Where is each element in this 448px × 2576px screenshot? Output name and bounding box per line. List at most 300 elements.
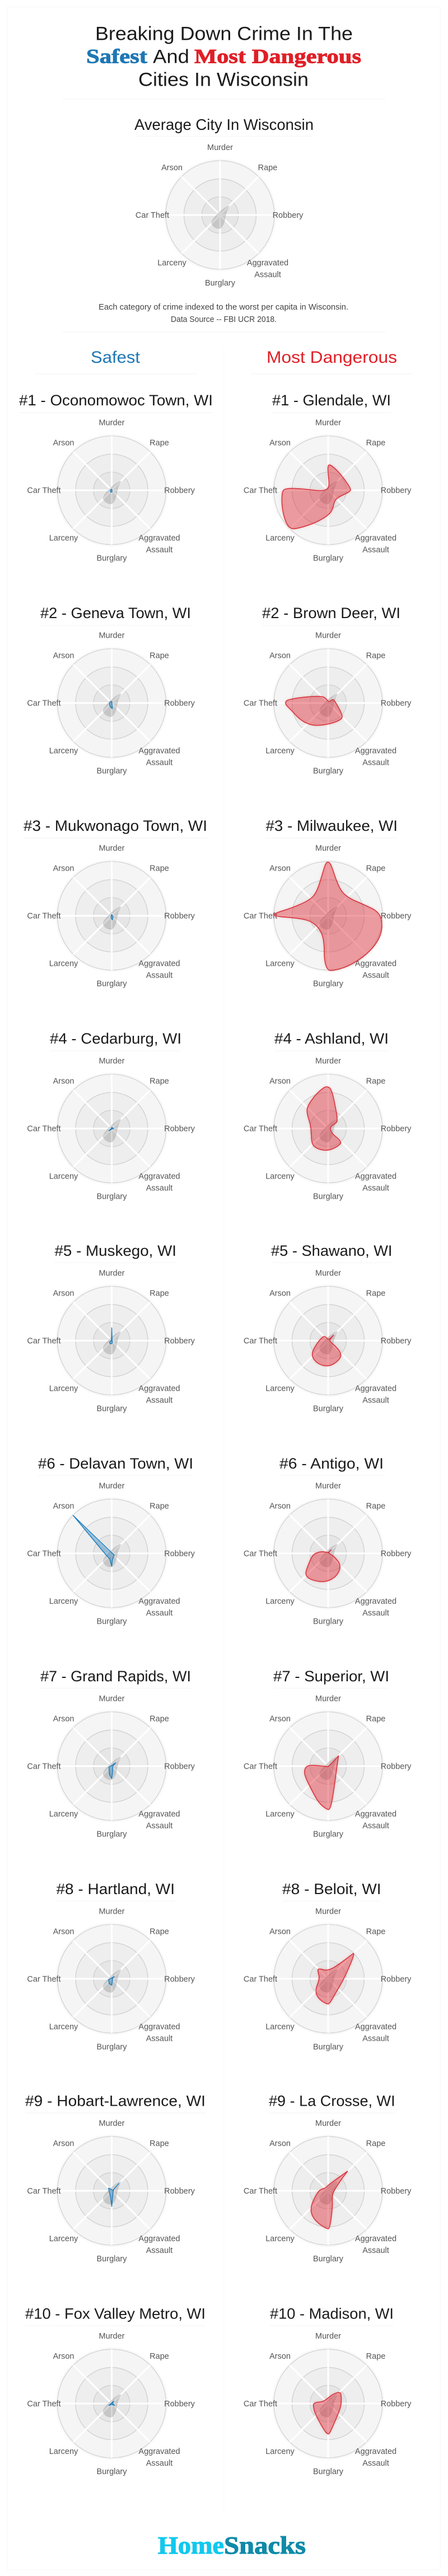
axis labels: Robbery — [164, 487, 195, 495]
axis labels: Murder — [99, 844, 125, 853]
panel: most dangerous #5 — [244, 1242, 412, 1413]
axis labels: Burglary — [313, 554, 344, 563]
radar chart — [27, 1481, 195, 1626]
axis labels: Aggravated — [355, 1172, 396, 1181]
axis labels: Arson — [161, 163, 183, 172]
city title: #2 - Brown Deer, WI — [262, 605, 400, 621]
axis labels: Rape — [150, 1502, 169, 1511]
axis labels: Aggravated — [355, 534, 396, 543]
data shape — [109, 1976, 114, 1985]
panel: most dangerous #4 — [244, 1030, 412, 1201]
panel: most dangerous #9 — [244, 2093, 412, 2264]
axis labels: Rape — [150, 864, 169, 873]
city title: #4 - Ashland, WI — [274, 1030, 389, 1047]
radar chart — [27, 632, 195, 776]
axis labels: Arson — [269, 2352, 291, 2361]
axis labels: Car Theft — [136, 211, 169, 220]
axis labels: Robbery — [381, 487, 412, 495]
title: Most Dangerous — [194, 45, 361, 67]
data shape — [306, 1550, 340, 1582]
city title: #9 - La Crosse, WI — [269, 2093, 395, 2110]
data shape — [316, 1953, 353, 2004]
panel: most dangerous #8 — [244, 1881, 412, 2051]
axis labels: Car Theft — [27, 2400, 61, 2409]
axis labels: Murder — [315, 2119, 341, 2128]
axis labels: Burglary — [96, 767, 127, 776]
city title: #9 - Hobart-Lawrence, WI — [25, 2093, 206, 2110]
axis labels: Murder — [315, 1481, 341, 1490]
radar chart — [27, 2119, 195, 2264]
data shape — [286, 696, 342, 726]
axis labels: Assault — [362, 2459, 389, 2468]
panel: safest #7 — [27, 1668, 195, 1839]
city title: #8 - Hartland, WI — [56, 1881, 175, 1897]
data shape — [314, 2392, 342, 2434]
axis labels: Arson — [269, 1289, 291, 1298]
axis labels: Car Theft — [244, 2400, 277, 2409]
axis labels: Larceny — [265, 1384, 295, 1393]
axis labels — [244, 2332, 412, 2476]
axis labels: Assault — [362, 1609, 389, 1618]
axis labels: Rape — [366, 439, 385, 448]
radar chart — [27, 844, 195, 989]
axis labels: Larceny — [49, 1172, 78, 1181]
axis labels: Robbery — [164, 2187, 195, 2196]
data shape — [109, 2401, 114, 2405]
radar chart — [27, 1269, 195, 1413]
axis labels: Rape — [366, 864, 385, 873]
city title: #8 - Beloit, WI — [282, 1881, 381, 1897]
axis labels: Car Theft — [27, 1337, 61, 1346]
axis labels: Murder — [315, 1907, 341, 1916]
axis labels: Murder — [315, 419, 341, 428]
axis labels: Larceny — [49, 1384, 78, 1393]
axis labels: Aggravated — [138, 2234, 180, 2243]
city title: #10 - Fox Valley Metro, WI — [25, 2306, 206, 2322]
axis labels: Assault — [362, 1822, 389, 1831]
axis labels: Assault — [146, 2034, 172, 2043]
axis labels: Aggravated — [138, 1384, 180, 1393]
axis labels: Murder — [315, 1269, 341, 1278]
axis labels: Burglary — [96, 980, 127, 989]
axis labels: Aggravated — [355, 2447, 396, 2456]
axis labels: Larceny — [49, 1810, 78, 1818]
axis labels: Larceny — [265, 960, 295, 969]
axis labels: Burglary — [313, 1404, 344, 1413]
data shape — [109, 2184, 119, 2206]
axis labels: Rape — [150, 1714, 169, 1723]
axis labels: Car Theft — [27, 1762, 61, 1771]
note: data source: Data Source -- FBI UCR 2018. — [171, 315, 277, 324]
axis labels: Murder — [99, 632, 125, 641]
axis labels: Aggravated — [138, 1172, 180, 1181]
axis labels: Arson — [269, 1502, 291, 1511]
axis labels: Burglary — [313, 2042, 344, 2051]
radar chart — [244, 1481, 412, 1626]
axis labels: Burglary — [96, 1404, 127, 1413]
axis labels: Robbery — [381, 1975, 412, 1984]
panel: most dangerous #6 — [244, 1455, 412, 1626]
panel: most dangerous #7 — [244, 1668, 412, 1839]
axis labels: Aggravated — [138, 960, 180, 969]
axis labels: Larceny — [265, 2022, 295, 2031]
panel: safest #5 — [27, 1242, 195, 1413]
axis labels: Larceny — [265, 2234, 295, 2243]
axis labels: Aggravated — [138, 2447, 180, 2456]
axis labels: Arson — [53, 1502, 74, 1511]
axis labels — [244, 1907, 412, 2051]
logo: HomeSnacks — [158, 2532, 306, 2559]
axis labels: Car Theft — [244, 1125, 277, 1134]
axis labels: Larceny — [49, 2234, 78, 2243]
city title: #4 - Cedarburg, WI — [50, 1030, 181, 1047]
panel: safest #9 — [25, 2093, 206, 2264]
panel: most dangerous #1 — [244, 392, 412, 563]
logo: HomeSnacks: Snacks — [224, 2532, 306, 2559]
panel: safest #3 — [24, 817, 207, 989]
axis labels: Assault — [362, 1396, 389, 1405]
axis labels: Assault — [254, 270, 281, 279]
radar grid — [165, 160, 276, 270]
axis labels: Robbery — [164, 1125, 195, 1134]
axis labels: Aggravated — [355, 2234, 396, 2243]
axis labels — [27, 2119, 195, 2264]
radar chart — [27, 419, 195, 563]
axis labels: Aggravated — [138, 747, 180, 756]
data shape — [274, 862, 382, 970]
axis labels: Car Theft — [27, 1125, 61, 1134]
axis labels: Assault — [362, 971, 389, 980]
axis labels: Rape — [150, 2139, 169, 2148]
axis labels: Murder — [99, 2119, 125, 2128]
data shape — [312, 1335, 341, 1366]
radar chart — [244, 844, 412, 989]
axis labels: Rape — [366, 1714, 385, 1723]
data shape — [73, 1515, 114, 1567]
axis labels: Arson — [269, 1077, 291, 1086]
axis labels: Murder — [315, 1057, 341, 1066]
axis labels: Assault — [146, 2459, 172, 2468]
panel: safest #8 — [27, 1881, 195, 2051]
axis labels: Arson — [269, 1714, 291, 1723]
radar chart — [27, 2332, 195, 2476]
axis labels: Car Theft — [244, 2187, 277, 2196]
axis labels: Rape — [366, 1077, 385, 1086]
axis labels: Aggravated — [138, 1597, 180, 1606]
axis labels: Robbery — [164, 699, 195, 708]
panel: most dangerous #2 — [244, 605, 412, 776]
axis labels: Assault — [362, 2034, 389, 2043]
panel: safest #2 — [27, 605, 195, 776]
axis labels: Robbery — [273, 211, 304, 220]
data shape — [305, 1756, 338, 1810]
radar chart — [27, 1907, 195, 2051]
axis labels: Larceny — [49, 2022, 78, 2031]
axis labels: Car Theft — [244, 1550, 277, 1559]
axis labels: Burglary — [313, 1193, 344, 1201]
axis labels: Larceny — [265, 1810, 295, 1818]
axis labels — [27, 1269, 195, 1413]
axis labels — [27, 1907, 195, 2051]
axis labels: Larceny — [265, 747, 295, 756]
axis labels: Larceny — [265, 534, 295, 543]
data shape — [311, 2171, 348, 2229]
data shape — [109, 1762, 115, 1778]
axis labels — [244, 632, 412, 776]
axis labels: Car Theft — [27, 699, 61, 708]
axis labels: Larceny — [157, 259, 187, 268]
city title: #7 - Superior, WI — [273, 1668, 389, 1685]
data shape — [110, 702, 112, 709]
note: data source: Each category of crime indexed to the worst per capita in Wisconsin. — [99, 303, 348, 312]
axis labels: Arson — [53, 1927, 74, 1936]
axis labels: Assault — [362, 759, 389, 768]
column divider — [223, 347, 224, 2514]
data shape — [109, 1128, 114, 1131]
axis labels: Murder — [99, 1694, 125, 1703]
radar chart — [244, 1269, 412, 1413]
axis labels: Arson — [269, 1927, 291, 1936]
axis labels: Aggravated — [355, 1384, 396, 1393]
axis labels: Rape — [366, 1502, 385, 1511]
data shape — [110, 489, 112, 492]
axis labels — [27, 632, 195, 776]
title: Safest — [86, 45, 147, 67]
data shape — [307, 1087, 340, 1151]
city title: #6 - Delavan Town, WI — [38, 1455, 193, 1472]
axis labels — [244, 844, 412, 989]
axis labels: Burglary — [313, 980, 344, 989]
axis labels — [27, 1057, 195, 1201]
axis labels: Murder — [315, 2332, 341, 2341]
axis labels: Rape — [366, 1927, 385, 1936]
axis labels — [244, 419, 412, 563]
axis labels: Car Theft — [244, 1762, 277, 1771]
axis labels: Robbery — [164, 1762, 195, 1771]
axis labels: Robbery — [164, 1550, 195, 1559]
axis labels: Burglary — [96, 2467, 127, 2476]
axis labels: Arson — [269, 864, 291, 873]
axis labels: Burglary — [313, 1830, 344, 1839]
axis labels: Robbery — [164, 912, 195, 921]
axis labels: Robbery — [164, 1337, 195, 1346]
panel: safest #1 — [19, 392, 213, 563]
data shape — [111, 915, 113, 920]
radar chart — [244, 1907, 412, 2051]
panel: safest #6 — [27, 1455, 195, 1626]
axis labels: Aggravated — [355, 960, 396, 969]
axis labels: Burglary — [313, 767, 344, 776]
axis labels: Burglary — [313, 2255, 344, 2264]
axis labels: Aggravated — [355, 747, 396, 756]
radar chart — [27, 1694, 195, 1839]
axis labels: Car Theft — [27, 2187, 61, 2196]
axis labels: Assault — [146, 1396, 172, 1405]
axis labels — [244, 2119, 412, 2264]
axis labels: Rape — [150, 439, 169, 448]
panel: most dangerous #10 — [244, 2306, 412, 2476]
axis labels — [244, 1694, 412, 1839]
radar chart — [244, 419, 412, 563]
axis labels: Murder — [315, 632, 341, 641]
axis labels: Robbery — [381, 912, 412, 921]
panel: most dangerous #3 — [244, 817, 412, 989]
data shape — [282, 465, 351, 529]
axis labels: Larceny — [49, 534, 78, 543]
city title: #3 - Mukwonago Town, WI — [24, 817, 207, 834]
axis labels: Car Theft — [244, 487, 277, 495]
axis labels: Assault — [146, 1609, 172, 1618]
axis labels: Car Theft — [27, 1550, 61, 1559]
axis labels: Rape — [366, 1289, 385, 1298]
axis labels: Rape — [150, 1289, 169, 1298]
title: Cities In Wisconsin — [138, 69, 309, 91]
axis labels — [27, 419, 195, 563]
axis labels: Murder — [99, 419, 125, 428]
axis labels: Assault — [362, 546, 389, 555]
axis labels: Burglary — [205, 279, 236, 288]
heading: most dangerous column: Most Dangerous — [267, 348, 397, 367]
axis labels: Robbery — [381, 2400, 412, 2409]
axis labels: Rape — [150, 2352, 169, 2361]
panel: safest #10 — [25, 2306, 206, 2476]
axis labels: Arson — [53, 1714, 74, 1723]
axis labels: Car Theft — [244, 1975, 277, 1984]
axis labels — [27, 844, 195, 989]
axis labels: Murder — [207, 143, 233, 152]
axis labels — [244, 1481, 412, 1626]
axis labels: Robbery — [381, 1550, 412, 1559]
title — [86, 24, 361, 91]
axis labels: Robbery — [164, 2400, 195, 2409]
axis labels: Assault — [146, 2246, 172, 2255]
city title: #1 - Glendale, WI — [272, 392, 391, 409]
axis labels: Burglary — [96, 1830, 127, 1839]
axis labels: Murder — [99, 1907, 125, 1916]
axis labels: Aggravated — [138, 534, 180, 543]
axis labels: Murder — [99, 2332, 125, 2341]
axis labels: Larceny — [49, 2447, 78, 2456]
axis labels — [136, 143, 304, 288]
city title: #7 - Grand Rapids, WI — [40, 1668, 191, 1685]
axis labels — [244, 1057, 412, 1201]
radar chart — [244, 2119, 412, 2264]
city title: #3 - Milwaukee, WI — [265, 817, 398, 834]
axis labels: Burglary — [313, 1617, 344, 1626]
axis labels: Murder — [99, 1269, 125, 1278]
axis labels: Burglary — [313, 2467, 344, 2476]
axis labels: Larceny — [265, 1172, 295, 1181]
axis labels: Larceny — [49, 960, 78, 969]
axis labels: Assault — [146, 1822, 172, 1831]
chart: average city radar — [136, 143, 304, 288]
axis labels: Assault — [146, 759, 172, 768]
axis labels: Arson — [53, 1077, 74, 1086]
axis labels — [27, 1694, 195, 1839]
axis labels: Burglary — [96, 2042, 127, 2051]
axis labels: Robbery — [381, 699, 412, 708]
axis labels: Burglary — [96, 2255, 127, 2264]
axis labels: Assault — [362, 1184, 389, 1193]
axis labels: Larceny — [49, 747, 78, 756]
axis labels: Arson — [53, 439, 74, 448]
axis labels: Assault — [146, 546, 172, 555]
axis labels: Robbery — [381, 1762, 412, 1771]
axis labels: Assault — [146, 971, 172, 980]
axis labels: Larceny — [49, 1597, 78, 1606]
data shape — [110, 1328, 112, 1344]
axis labels: Aggravated — [138, 2022, 180, 2031]
axis labels: Larceny — [265, 2447, 295, 2456]
title: Breaking Down Crime In The — [95, 24, 353, 45]
axis labels: Arson — [269, 439, 291, 448]
axis labels: Rape — [150, 652, 169, 661]
axis labels: Car Theft — [244, 699, 277, 708]
axis labels: Burglary — [96, 554, 127, 563]
axis labels: Rape — [366, 2139, 385, 2148]
axis labels: Rape — [258, 163, 277, 172]
axis labels: Larceny — [265, 1597, 295, 1606]
radar chart — [244, 1057, 412, 1201]
axis labels: Robbery — [381, 1125, 412, 1134]
axis labels: Car Theft — [27, 487, 61, 495]
axis labels: Robbery — [164, 1975, 195, 1984]
axis labels: Rape — [366, 652, 385, 661]
heading: average city: Average City In Wisconsin — [134, 116, 314, 133]
city title: #5 - Muskego, WI — [55, 1242, 176, 1259]
axis labels: Arson — [53, 652, 74, 661]
radar chart — [244, 1694, 412, 1839]
axis labels: Robbery — [381, 2187, 412, 2196]
axis labels: Aggravated — [355, 1810, 396, 1818]
axis labels: Car Theft — [27, 912, 61, 921]
axis labels: Car Theft — [27, 1975, 61, 1984]
axis labels: Assault — [146, 1184, 172, 1193]
axis labels: Robbery — [381, 1337, 412, 1346]
axis labels: Murder — [99, 1057, 125, 1066]
axis labels — [27, 2332, 195, 2476]
note: data source — [99, 303, 348, 324]
axis labels — [244, 1269, 412, 1413]
axis labels: Car Theft — [244, 1337, 277, 1346]
city title: #6 - Antigo, WI — [279, 1455, 384, 1472]
axis labels: Arson — [53, 2139, 74, 2148]
panel: safest #4 — [27, 1030, 195, 1201]
axis labels: Arson — [53, 2352, 74, 2361]
city title: #2 - Geneva Town, WI — [40, 605, 191, 621]
axis labels: Arson — [269, 652, 291, 661]
title: And — [153, 46, 189, 67]
city title: #10 - Madison, WI — [270, 2306, 394, 2322]
axis labels: Murder — [315, 844, 341, 853]
axis labels: Arson — [53, 1289, 74, 1298]
axis labels: Assault — [362, 2246, 389, 2255]
axis labels: Aggravated — [247, 259, 288, 268]
axis labels: Aggravated — [138, 1810, 180, 1818]
heading: safest column: Safest — [91, 348, 141, 367]
axis labels: Arson — [269, 2139, 291, 2148]
city title: #5 - Shawano, WI — [271, 1242, 392, 1259]
axis labels: Arson — [53, 864, 74, 873]
city title: #1 - Oconomowoc Town, WI — [19, 392, 213, 409]
axis labels: Aggravated — [355, 1597, 396, 1606]
radar chart — [27, 1057, 195, 1201]
axis labels — [27, 1481, 195, 1626]
axis labels: Murder — [315, 1694, 341, 1703]
axis labels: Burglary — [96, 1193, 127, 1201]
radar chart — [244, 2332, 412, 2476]
axis labels: Rape — [366, 2352, 385, 2361]
